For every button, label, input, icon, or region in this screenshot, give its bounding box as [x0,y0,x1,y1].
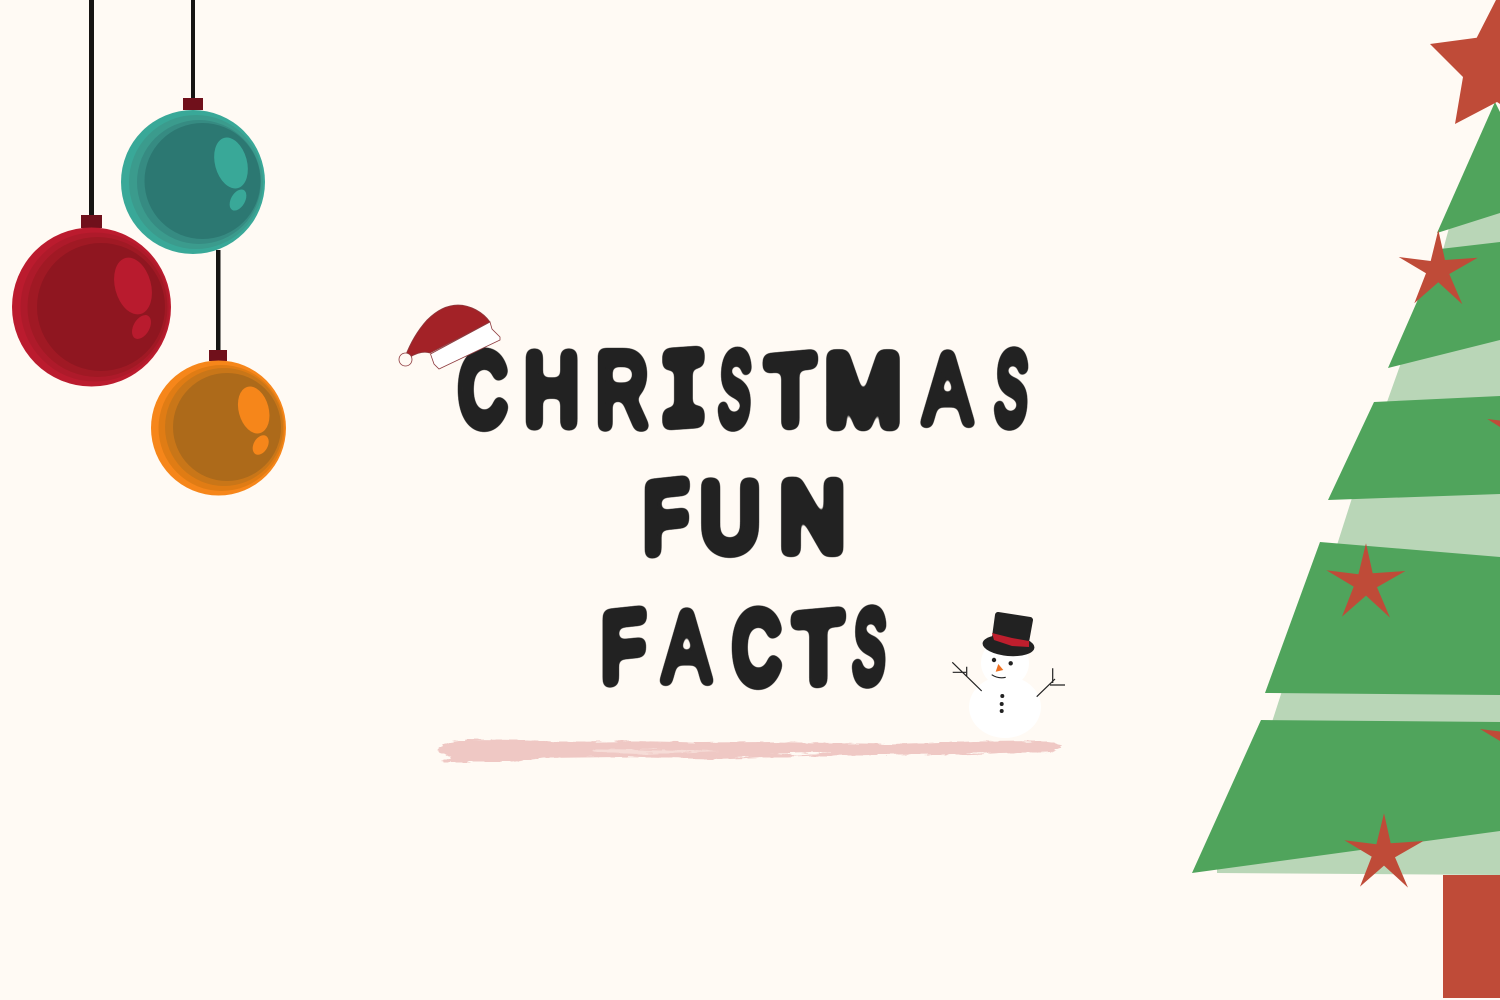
icon: hanging ornaments [12,0,286,496]
title line: CHRISTMAS [459,332,1031,455]
christmas tree [1192,0,1500,998]
ornament: orange [151,250,286,496]
snowman face and buttons [992,658,1013,713]
title line: CHRISTMAS: I [660,335,707,455]
icon: santa hat [399,305,500,369]
tree: trunk [1443,875,1500,998]
title [459,332,1031,705]
title line: FACTS [602,590,889,705]
title line: CHRISTMAS: M [825,336,901,446]
title line: CHRISTMAS: T [766,334,815,446]
tree: green tiers [1192,102,1500,873]
title line: FUN [644,462,845,574]
title line: FUN: F [644,462,688,574]
tree: decorative stars [1326,230,1500,888]
title line: CHRISTMAS: A [923,332,973,447]
title line: FUN: N [780,463,845,572]
title line: CHRISTMAS: H [525,334,578,445]
title line: FACTS: A [662,591,711,705]
title line: FACTS: T [794,592,842,704]
snowman body [969,639,1041,738]
snowman arms [952,662,1065,697]
ornament: teal [121,0,265,254]
title line: CHRISTMAS: S [992,332,1031,447]
ornament: red [12,0,171,386]
icon: snowman [952,615,1065,738]
brush stroke underline [438,740,1062,762]
title line: FACTS: F [602,591,645,702]
title line: CHRISTMAS: S [716,332,754,448]
tree: pale background bands [1217,210,1500,875]
title line: FACTS: C [733,592,780,703]
snowman top hat [982,615,1035,658]
title line: CHRISTMAS: C [459,334,506,445]
title line: FACTS: S [850,590,889,705]
title line: CHRISTMAS: R [596,332,649,450]
tree: top star [1430,0,1500,124]
title line: FUN: U [701,463,760,571]
